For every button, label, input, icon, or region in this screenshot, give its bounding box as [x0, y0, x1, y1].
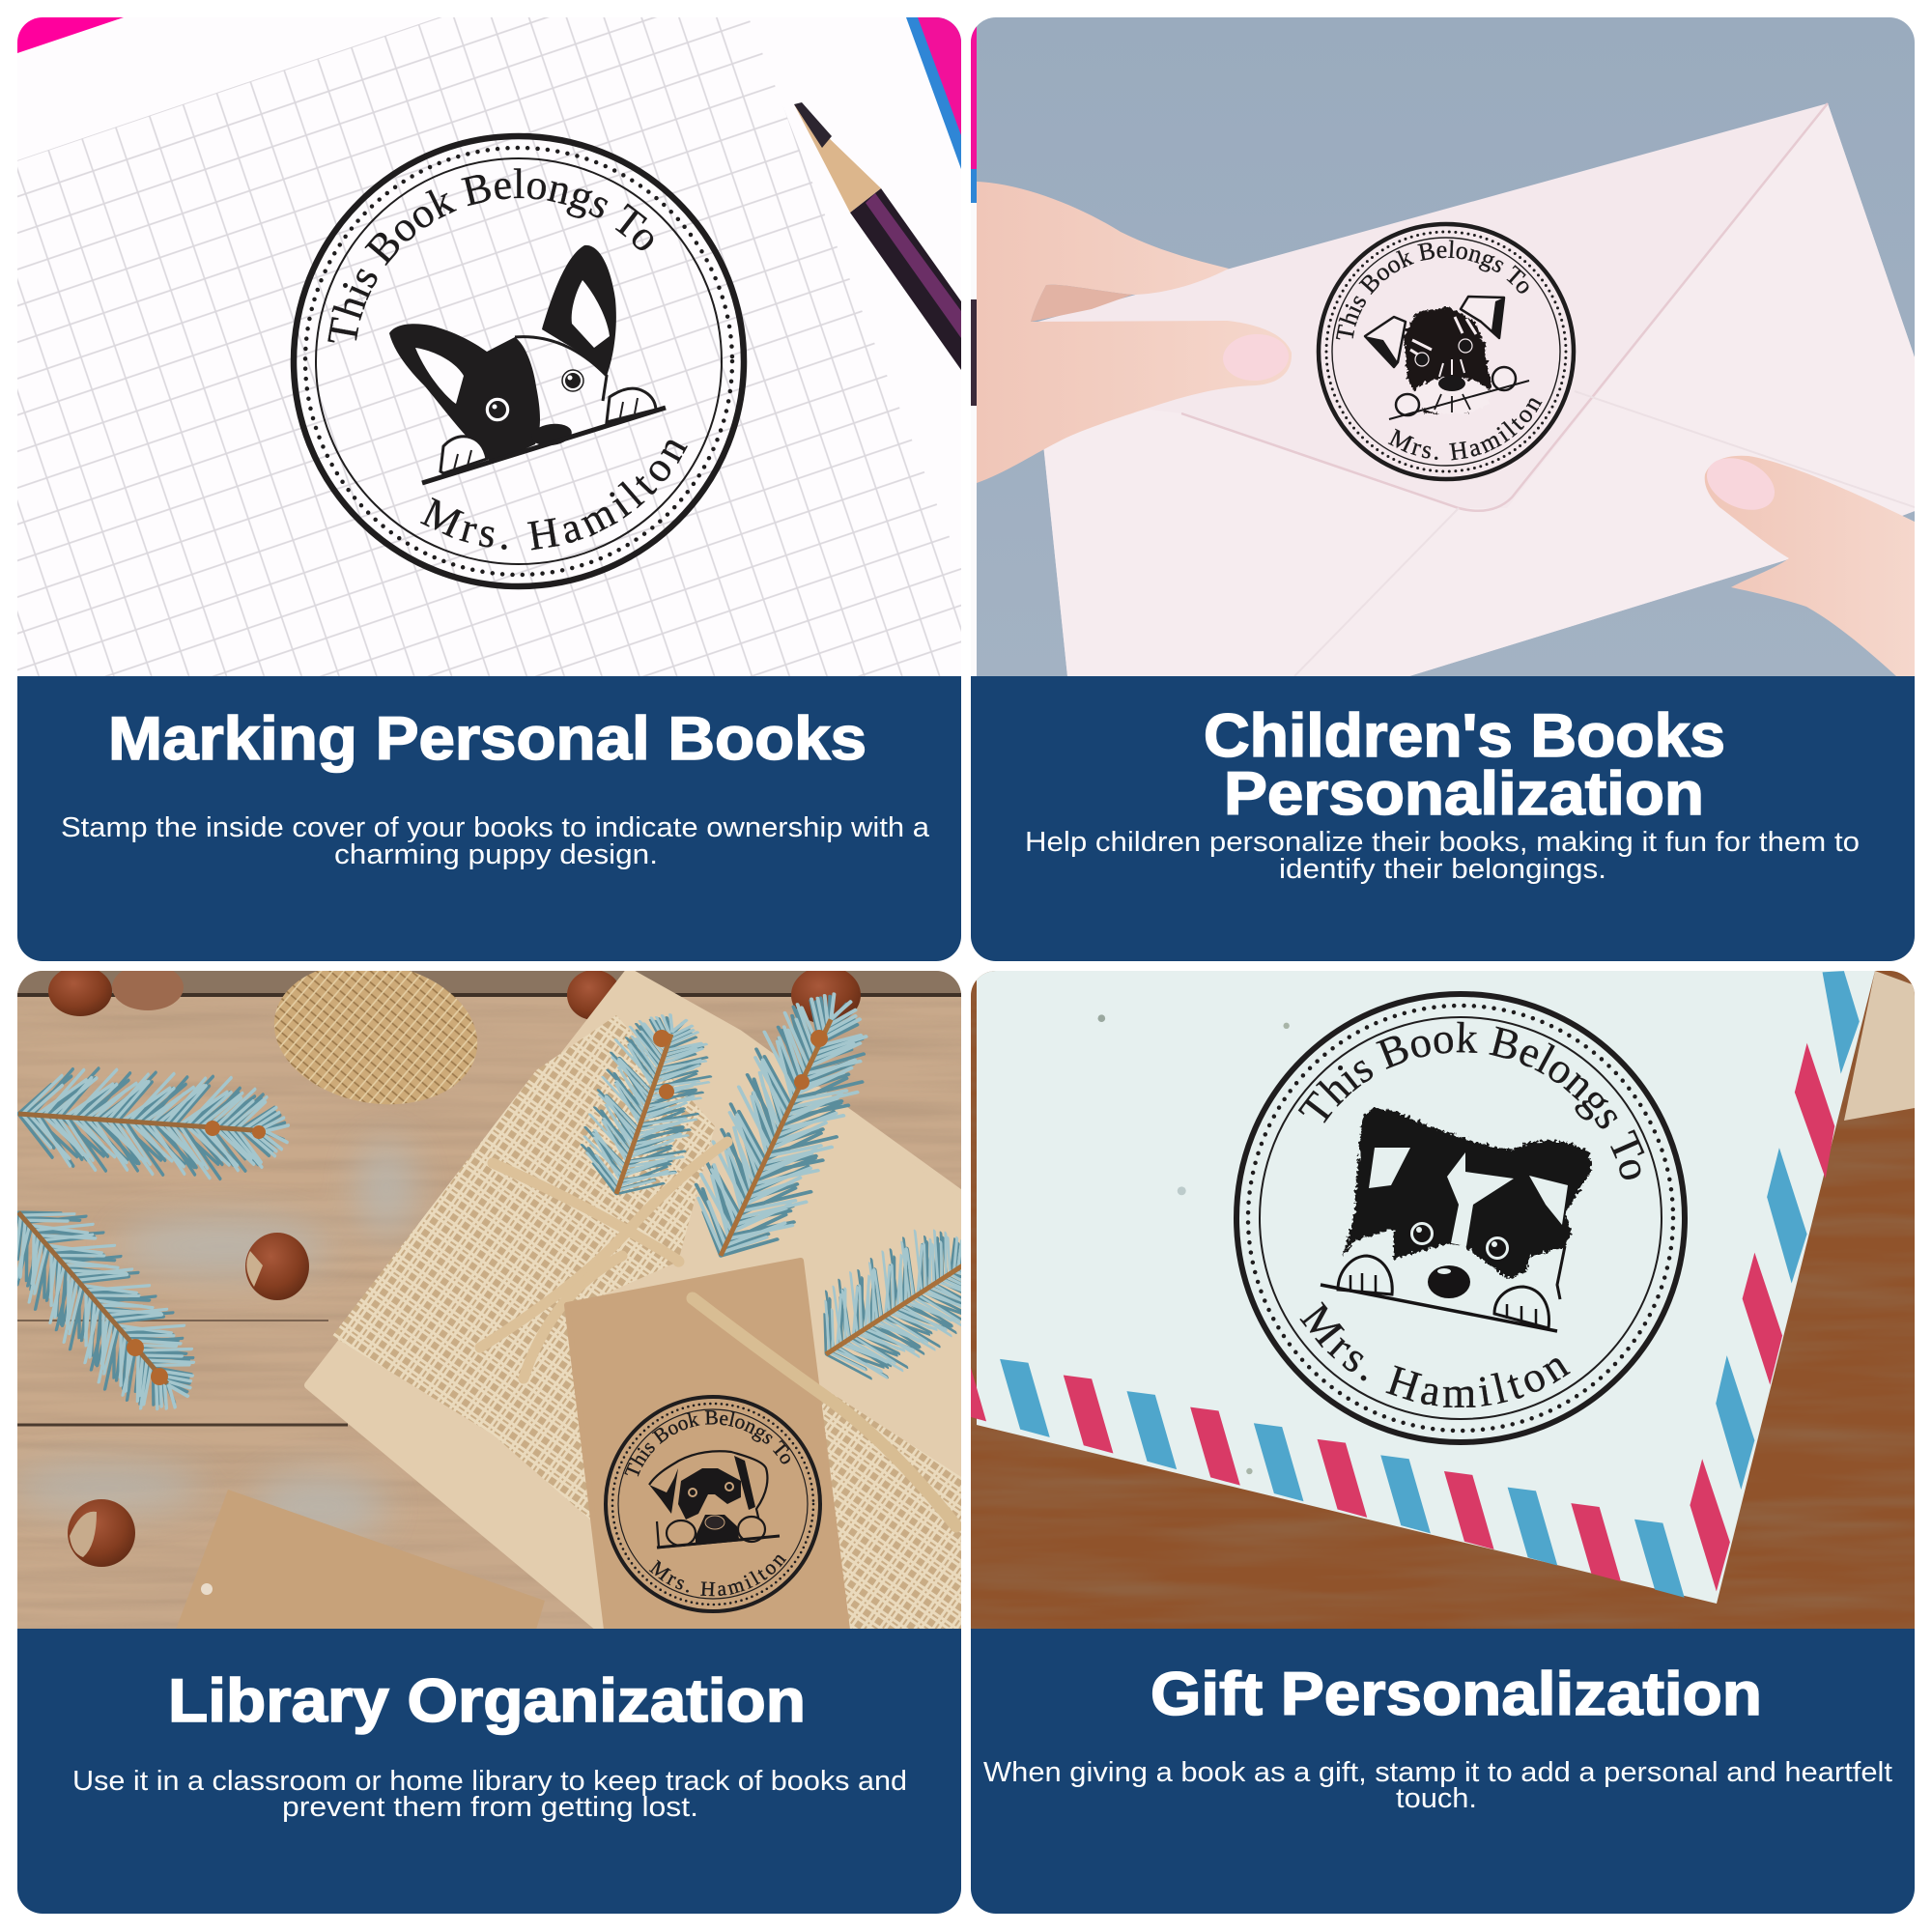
body text: touch. — [1396, 1783, 1477, 1814]
heading — [1206, 711, 1723, 815]
body text — [72, 1766, 907, 1823]
caption band — [971, 1629, 1915, 1914]
icon: schnauzer puppy — [1365, 297, 1529, 419]
panel: marking personal books — [17, 17, 961, 961]
envelope — [1031, 103, 1915, 676]
body text — [1025, 827, 1860, 885]
branch B — [0, 1179, 220, 1435]
stamp: this book belongs to, boston terrier: This Book Belongs To — [327, 168, 653, 343]
heading: Marking Personal Books — [108, 705, 867, 773]
hazelnuts — [48, 964, 861, 1567]
photo: grid paper with stamp and pencil — [17, 17, 961, 676]
body text — [61, 812, 930, 870]
caption band — [17, 676, 961, 961]
body text: prevent them from getting lost. — [282, 1792, 698, 1823]
panel: children's books personalization — [971, 17, 1915, 961]
small kraft tag — [176, 1490, 545, 1630]
stamp: this book belongs to, retriever — [604, 1395, 822, 1613]
left hand — [977, 182, 1292, 483]
airmail stripes — [936, 971, 1860, 1598]
caption band — [17, 1629, 961, 1914]
stamp: this book belongs to, boston terrier: Mrs. Hamilton — [419, 440, 688, 551]
branch E — [796, 1209, 1009, 1401]
stamp: this book belongs to, border collie: This Book Belongs To — [1298, 1022, 1644, 1179]
body text: Help children personalize their books, making it fun for them to — [1025, 827, 1860, 858]
icon: border collie puppy — [1321, 1108, 1591, 1331]
twine ball — [274, 971, 477, 1105]
panel: gift personalization — [971, 971, 1915, 1914]
stamp: this book belongs to, retriever: Mrs. Hamilton — [649, 1555, 786, 1596]
stamp: this book belongs to, retriever: This Book Belongs To — [624, 1410, 790, 1476]
stamp: this book belongs to, schnauzer — [1316, 222, 1577, 481]
icon: boston terrier puppy — [389, 245, 666, 483]
pine branches — [0, 974, 1009, 1435]
photo: hands holding envelope with stamp — [971, 17, 1915, 676]
heading: Personalization — [1224, 760, 1704, 828]
stamp: this book belongs to, boston terrier — [290, 133, 748, 589]
stamp: this book belongs to, border collie: Mrs. Hamilton — [1299, 1301, 1571, 1407]
stamp: this book belongs to, schnauzer: This Book Belongs To — [1335, 240, 1528, 340]
heading: Library Organization — [168, 1667, 806, 1735]
heading: Children's Books — [1204, 702, 1725, 770]
gift package — [308, 972, 961, 1630]
body text: charming puppy design. — [334, 839, 658, 870]
branch A — [14, 1064, 292, 1183]
body text — [983, 1757, 1892, 1814]
panel: library organization — [17, 971, 961, 1914]
right hand — [1698, 448, 1915, 676]
body text: Stamp the inside cover of your books to indicate ownership with a — [61, 812, 930, 843]
body text: Use it in a classroom or home library to keep track of books and — [72, 1766, 907, 1797]
pine buds — [127, 1030, 828, 1385]
photo: wrapped gift with pine and hazelnuts — [17, 971, 961, 1629]
stamp: this book belongs to, border collie — [1234, 991, 1688, 1445]
body text: When giving a book as a gift, stamp it to add a personal and heartfelt — [983, 1757, 1892, 1788]
caption band — [971, 676, 1915, 961]
photo: airmail envelope on wood with stamp — [971, 971, 1915, 1629]
icon: retriever puppy — [649, 1451, 780, 1548]
branch D — [671, 974, 891, 1279]
airmail paper — [977, 971, 1875, 1604]
icon: pencil — [794, 102, 961, 370]
stamp: this book belongs to, schnauzer: Mrs. Hamilton — [1387, 398, 1543, 460]
heading: Gift Personalization — [1151, 1661, 1762, 1728]
kraft tag with stamp — [564, 1258, 961, 1629]
branch C — [568, 1001, 725, 1210]
twine bow — [480, 1142, 727, 1378]
body text: identify their belongings. — [1279, 854, 1606, 885]
